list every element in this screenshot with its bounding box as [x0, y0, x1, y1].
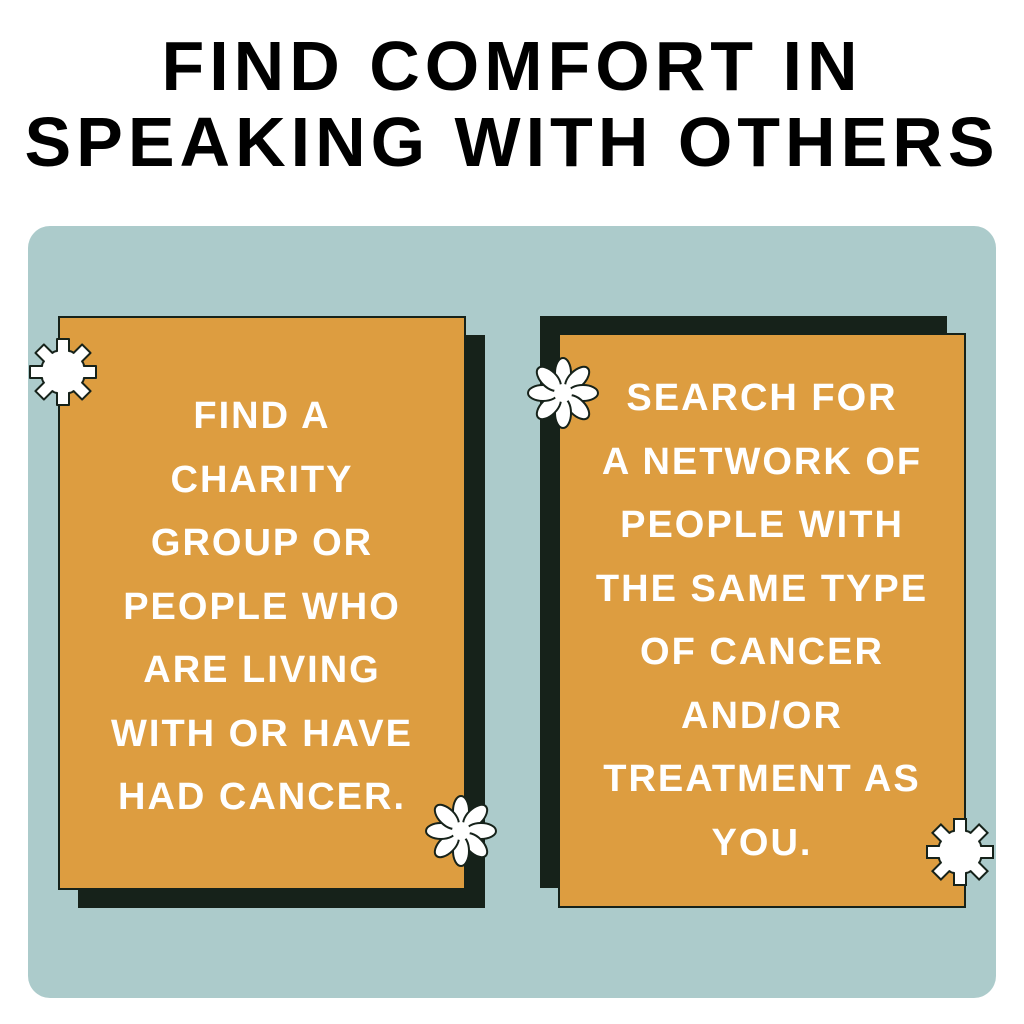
- title: FIND COMFORT IN: [161, 27, 863, 105]
- text: left card: HAD CANCER.: [118, 776, 406, 818]
- text: left card: FIND A: [193, 395, 331, 437]
- card: left: [58, 316, 466, 890]
- text: right card: AND/OR: [681, 694, 843, 736]
- text: left card: PEOPLE WHO: [123, 586, 401, 628]
- text: left card: ARE LIVING: [143, 649, 381, 691]
- icon: flower top-right: [527, 357, 599, 429]
- text: right card: SEARCH FOR: [626, 377, 898, 419]
- text: left card: CHARITY: [171, 458, 353, 500]
- icon: flower top-left: [29, 338, 97, 406]
- text: right card: TREATMENT AS: [603, 758, 921, 800]
- icon: flower bottom-right: [926, 818, 994, 886]
- text: left card: GROUP OR: [151, 522, 373, 564]
- card: right: [558, 333, 966, 908]
- text: right card: YOU.: [712, 822, 812, 864]
- text: left card: WITH OR HAVE: [111, 712, 413, 754]
- text: right card: PEOPLE WITH: [620, 504, 904, 546]
- text: right card: OF CANCER: [640, 631, 884, 673]
- title: [24, 27, 1000, 181]
- text: right card: [596, 377, 928, 864]
- text: right card: A NETWORK OF: [602, 440, 922, 482]
- panel: background: [28, 226, 996, 998]
- card shadow right: [540, 316, 947, 888]
- icon: flower bottom-left: [425, 795, 497, 867]
- title: SPEAKING WITH OTHERS: [24, 103, 1000, 181]
- card shadow left: [78, 335, 485, 908]
- text: left card: [111, 395, 413, 818]
- text: right card: THE SAME TYPE: [596, 568, 928, 610]
